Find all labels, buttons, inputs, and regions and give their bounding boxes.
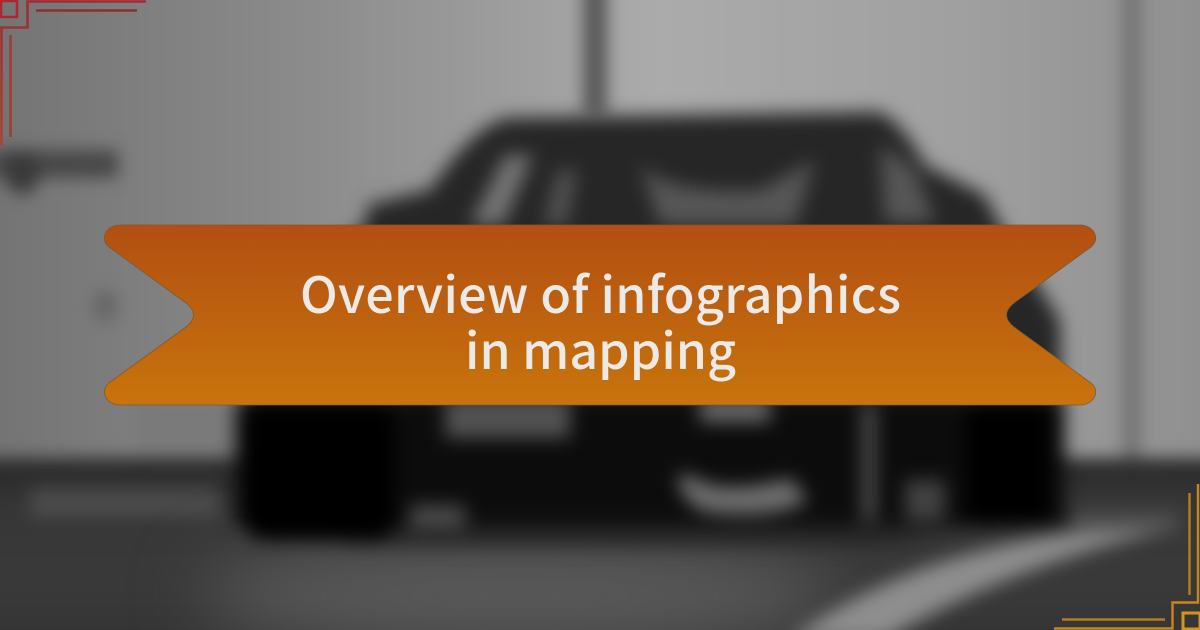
corner ornament: bottom right gold xyxy=(1054,484,1200,630)
car silhouette xyxy=(240,112,1062,545)
corner ornament: top left red xyxy=(0,0,146,146)
title: Overview of infographics xyxy=(300,256,901,328)
road marking xyxy=(790,528,1170,630)
small square xyxy=(1183,613,1200,629)
small square xyxy=(1,1,17,17)
title: in mapping xyxy=(465,312,736,384)
